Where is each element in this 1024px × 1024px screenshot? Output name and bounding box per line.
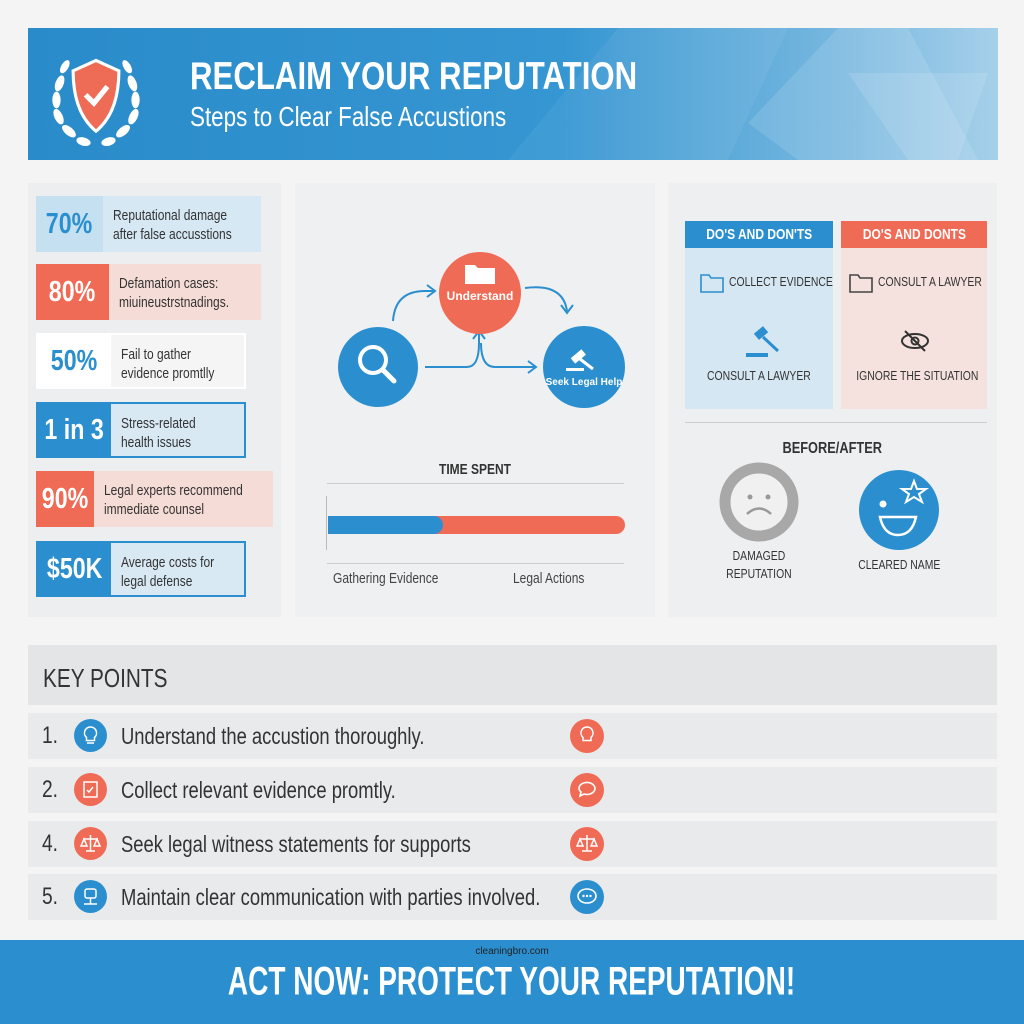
chart: time spent: TIME SPENT	[439, 461, 511, 478]
do column: COLLECT EVIDENCE	[729, 274, 833, 289]
step: seek legal help: Seek Legal Help	[546, 377, 622, 388]
step: understand: Understand	[447, 289, 513, 303]
key point 4: 4.	[42, 830, 58, 857]
do column: CONSULT A LAWYER	[707, 368, 811, 383]
stat 90%: immediate counsel	[104, 501, 204, 518]
stat 80%	[36, 264, 261, 320]
subtitle: Steps to Clear False Accustions	[190, 101, 506, 132]
chart: time spent: Gathering Evidence	[333, 570, 438, 587]
icon: search circle	[338, 327, 418, 407]
stat 50%: evidence promtlly	[121, 365, 214, 382]
label: damaged reputation	[726, 548, 792, 581]
icon: shield with laurel	[52, 58, 140, 146]
flow diagram	[338, 252, 625, 408]
key point 1	[28, 713, 997, 759]
key point 4	[28, 821, 997, 867]
chart: time spent: Legal Actions	[513, 570, 584, 587]
don't column	[841, 221, 987, 409]
don't column: IGNORE THE SITUATION	[856, 368, 978, 383]
stat 80%: Defamation cases:	[119, 275, 218, 292]
step: seek legal help	[543, 326, 625, 408]
key point 5: Maintain clear communication with parties involved.	[121, 884, 540, 910]
header banner	[28, 28, 998, 160]
stat 70%: Reputational damage	[113, 207, 227, 224]
stat 70%: 70%	[46, 208, 93, 240]
chart: time spent	[326, 461, 625, 587]
stat 1 in 3: 1 in 3	[45, 414, 104, 446]
stat 90%: 90%	[42, 482, 88, 514]
title: RECLAIM YOUR REPUTATION	[190, 55, 637, 98]
label: damaged reputation: DAMAGED	[733, 548, 785, 563]
stat 90%: Legal experts recommend	[104, 482, 243, 499]
step: understand	[439, 252, 521, 334]
stat $50K	[36, 541, 246, 597]
key point 2: 2.	[42, 776, 58, 803]
stat 1 in 3: Stress-related	[121, 415, 196, 432]
don't column: CONSULT A LAWYER	[878, 274, 982, 289]
do column: DO'S AND DON'TS	[706, 226, 812, 243]
stat 50%: 50%	[51, 344, 98, 376]
key point 5	[28, 874, 997, 920]
panel: statistics	[28, 183, 281, 617]
key point 2: Collect relevant evidence promtly.	[121, 777, 396, 803]
watermark: cleaningbro.com	[475, 946, 549, 957]
stat 50%	[36, 333, 246, 389]
stat 70%: after false accusstions	[113, 226, 231, 243]
stat $50K: $50K	[47, 552, 102, 584]
stat 1 in 3	[36, 402, 246, 458]
key point 1: 1.	[42, 722, 58, 749]
key point 4: Seek legal witness statements for supports	[121, 831, 471, 857]
label: damaged reputation: REPUTATION	[726, 566, 792, 581]
key point 2	[28, 767, 997, 813]
key point 5: 5.	[42, 883, 58, 910]
key points heading	[28, 645, 997, 705]
stat 70%	[36, 196, 261, 252]
stat 90%	[36, 471, 273, 527]
label: cleared name: CLEARED NAME	[858, 557, 940, 572]
panel: do's and don'ts	[668, 183, 997, 617]
key point 1: Understand the accustion thoroughly.	[121, 723, 424, 749]
stat 50%: Fail to gather	[121, 346, 191, 363]
stat 80%: 80%	[49, 276, 96, 308]
stat $50K: Average costs for	[121, 554, 214, 571]
stat $50K: legal defense	[121, 573, 192, 590]
footer banner	[0, 940, 1024, 1024]
before/after heading: BEFORE/AFTER	[783, 440, 882, 457]
do column	[685, 221, 833, 409]
stat 1 in 3: health issues	[121, 434, 191, 451]
panel: process flow	[295, 183, 655, 617]
stat 80%: miuineustrstnadings.	[119, 294, 229, 311]
icon: happy face	[859, 470, 939, 550]
call to action: ACT NOW: PROTECT YOUR REPUTATION!	[228, 959, 796, 1004]
key points heading: KEY POINTS	[43, 663, 167, 693]
don't column: DO'S AND DONTS	[862, 226, 966, 243]
icon: sad face	[720, 462, 798, 542]
